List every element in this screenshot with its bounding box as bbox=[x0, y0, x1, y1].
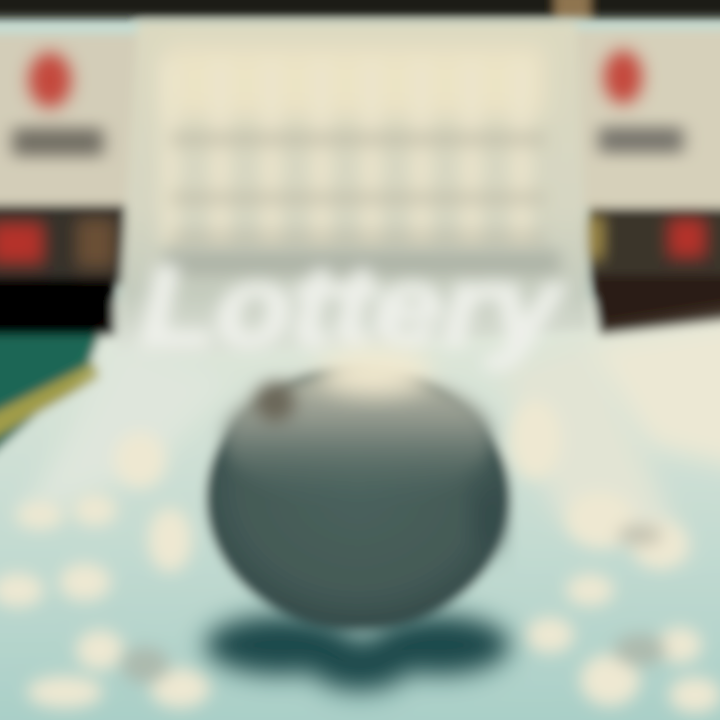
left red block bbox=[0, 222, 44, 264]
background floor bbox=[0, 300, 720, 720]
panel: left ticket bbox=[0, 34, 140, 336]
warm top glow bbox=[165, 46, 545, 116]
grey band under the grid bbox=[165, 250, 560, 276]
panel: central number sheet bbox=[116, 22, 590, 360]
icon: cauldron bbox=[205, 350, 510, 691]
cauldron right shadow bbox=[474, 479, 502, 551]
left brown block bbox=[76, 218, 116, 268]
right red block bbox=[668, 218, 706, 258]
floor fan from the sheet bbox=[20, 340, 690, 560]
cauldron opening glow bbox=[317, 350, 433, 394]
icon: left red emblem bbox=[28, 52, 72, 108]
right dark label bbox=[598, 127, 684, 153]
cauldron feet bbox=[205, 615, 510, 691]
right floor glow bbox=[590, 320, 720, 470]
number grid rows bbox=[170, 132, 545, 244]
panel: green felt with yellow stripe bbox=[0, 335, 100, 475]
scattered tickets bbox=[0, 400, 720, 713]
cauldron upper sheen bbox=[223, 372, 493, 504]
heading: Lottery bbox=[140, 244, 565, 369]
cauldron rim shadow bbox=[255, 382, 295, 422]
panel: right ticket bbox=[575, 30, 720, 335]
number grid columns bbox=[160, 60, 532, 245]
ticket shadows bbox=[121, 525, 666, 683]
top dark strip bbox=[0, 0, 720, 18]
cauldron body bbox=[206, 366, 510, 630]
icon: right red emblem bbox=[603, 50, 643, 104]
left dark label bbox=[12, 128, 104, 156]
right yellow block bbox=[584, 215, 604, 260]
